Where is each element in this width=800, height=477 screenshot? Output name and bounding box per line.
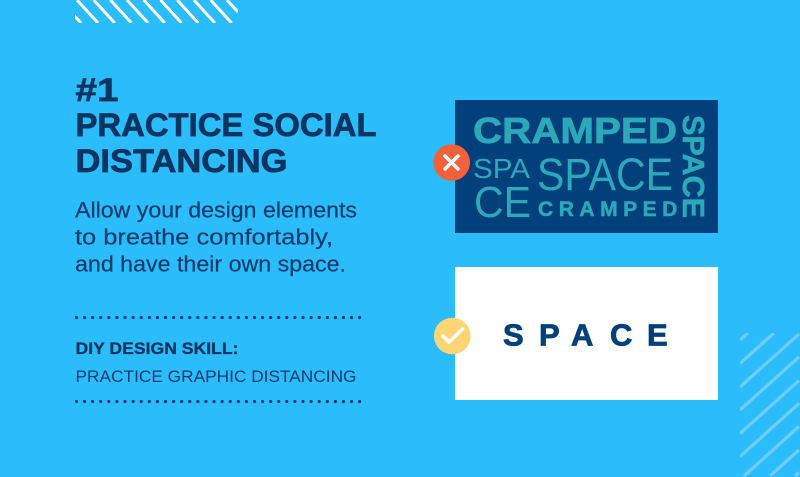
word: CE: CE bbox=[474, 178, 531, 227]
body text: Allow your design elements bbox=[75, 198, 357, 223]
body text: and have their own space. bbox=[75, 252, 346, 277]
heading: PRACTICE SOCIAL bbox=[76, 107, 376, 143]
decorative stripes: bottom right bbox=[740, 333, 799, 476]
skill description: PRACTICE GRAPHIC DISTANCING bbox=[76, 368, 356, 386]
skill label: DIY DESIGN SKILL: bbox=[76, 340, 239, 358]
dotted divider: top bbox=[76, 316, 360, 319]
icon: red cross bbox=[433, 144, 470, 181]
body text: to breathe comfortably, bbox=[75, 225, 333, 250]
word: CRAMPED small: CRAMPED bbox=[538, 198, 677, 221]
heading: #1 bbox=[76, 72, 118, 108]
word: SPA: SPA bbox=[473, 153, 530, 184]
word: SPACE spaced: SPACE bbox=[503, 318, 668, 352]
icon: yellow check bbox=[434, 318, 471, 354]
panel: spaced example bbox=[455, 267, 718, 400]
heading: DISTANCING bbox=[76, 143, 288, 179]
panel: cramped example bbox=[455, 100, 718, 233]
decorative stripes: top bbox=[60, 0, 238, 23]
dotted divider: bottom bbox=[76, 400, 360, 403]
body text bbox=[75, 198, 357, 277]
word: SPACE vertical: SPACE bbox=[676, 115, 711, 218]
word: SPACE large: SPACE bbox=[537, 149, 673, 200]
heading bbox=[76, 72, 376, 179]
word: CRAMPED large: CRAMPED bbox=[473, 110, 677, 151]
